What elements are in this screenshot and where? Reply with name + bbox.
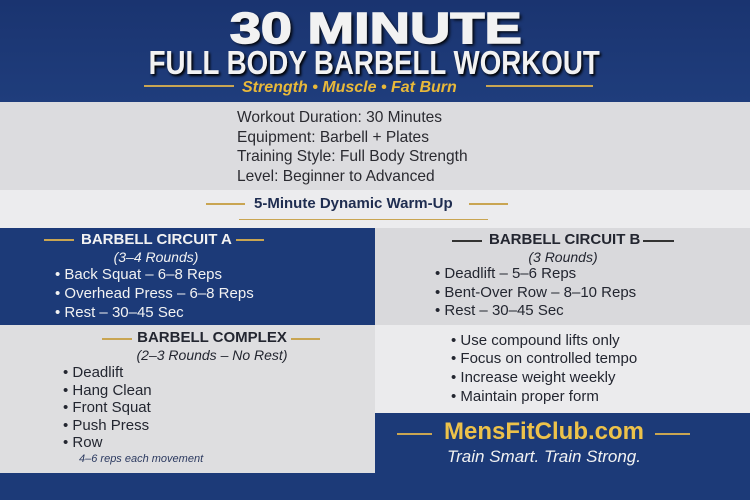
panel: barbell complex: • Row [63,434,102,451]
panel: circuit B: • Bent-Over Row – 8–10 Reps [435,284,636,301]
panel: circuit A [0,228,375,325]
panel: tips: • Increase weight weekly [451,369,616,386]
panel: brand: Train Smart. Train Strong. [447,447,641,466]
title: 30 MINUTE [230,4,522,53]
info text: Equipment: Barbell + Plates [237,128,429,146]
panel: barbell complex: • Deadlift [63,364,123,381]
panel: barbell complex: • Hang Clean [63,382,152,398]
panel: tips: • Maintain proper form [451,388,599,405]
header band [0,0,750,102]
panel: brand [375,413,750,500]
info text [237,109,468,184]
panel: circuit B: (3 Rounds) [528,249,598,265]
panel: barbell complex: • Front Squat [63,399,151,416]
panel: circuit B: BARBELL CIRCUIT B [489,231,640,248]
warm-up label: 5-Minute Dynamic Warm-Up [254,195,453,212]
panel: barbell complex: • Push Press [63,416,149,434]
panel: tips: • Focus on controlled tempo [451,350,637,367]
panel: circuit B: • Rest – 30–45 Sec [435,302,564,319]
tagline: Strength • Muscle • Fat Burn [242,79,457,96]
panel: circuit A: • Back Squat – 6–8 Reps [55,266,222,283]
panel: circuit A: BARBELL CIRCUIT A [81,231,232,248]
info band [0,102,750,190]
panel: barbell complex [0,325,375,473]
info text: Workout Duration: 30 Minutes [237,109,442,126]
panel: circuit B: • Deadlift – 5–6 Reps [435,265,576,282]
info text: Level: Beginner to Advanced [237,168,435,184]
panel: circuit B [375,228,750,325]
info text: Training Style: Full Body Strength [237,148,468,165]
panel: circuit A: • Overhead Press – 6–8 Reps [55,285,254,302]
subtitle: FULL BODY BARBELL WORKOUT [149,44,600,81]
panel: circuit A: • Rest – 30–45 Sec [55,304,184,321]
panel: barbell complex: BARBELL COMPLEX [137,329,287,346]
note: 4–6 reps each movement [79,453,203,465]
panel: tips: • Use compound lifts only [451,332,620,349]
panel: tips [375,325,750,413]
warm-up strip [0,190,750,228]
panel: circuit A: (3–4 Rounds) [114,249,198,265]
panel: barbell complex: (2–3 Rounds – No Rest) [137,347,287,363]
panel: brand: MensFitClub.com [444,418,644,445]
